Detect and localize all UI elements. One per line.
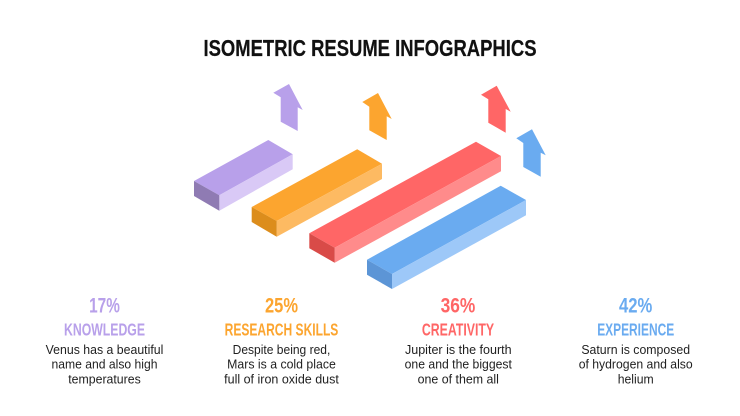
percentage: 42%: 42% [619,294,653,318]
arrow: experience [516,129,546,177]
description: research skills: full of iron oxide dust [224,371,339,386]
percentage: 17%: 17% [89,294,120,318]
description: research skills [224,342,339,386]
panel: knowledge [46,294,163,386]
description: creativity: Jupiter is the fourth [405,342,512,357]
description: knowledge [46,342,163,386]
description: experience [579,342,693,386]
label: knowledge: KNOWLEDGE [64,319,145,339]
description: creativity [405,342,512,386]
label: creativity: CREATIVITY [422,319,494,339]
arrow: research skills [362,93,392,140]
bar: experience [367,186,526,289]
arrow: knowledge [273,84,303,131]
bar: research skills [252,149,382,237]
description: research skills: Despite being red, [233,342,330,357]
title: ISOMETRIC RESUME INFOGRAPHICS [204,35,536,61]
description: research skills: Mars is a cold place [227,357,336,372]
label: experience: EXPERIENCE [597,319,674,339]
description: experience: Saturn is composed [581,342,690,357]
description: knowledge: temperatures [68,371,141,386]
label: research skills: RESEARCH SKILLS [225,319,338,339]
arrow: creativity [481,86,511,133]
panel: creativity [405,294,512,386]
bar: creativity [309,142,501,263]
description: creativity: one of them all [418,371,499,386]
description: knowledge: name and also high [52,357,158,372]
description: experience: helium [618,371,654,386]
panel: research skills [224,294,339,386]
percentage: 25%: 25% [265,294,298,318]
bar: knowledge [194,140,293,211]
description: creativity: one and the biggest [405,357,512,372]
percentage: 36%: 36% [441,294,476,318]
isometric bar chart [194,84,546,289]
description: experience: of hydrogen and also [579,357,693,372]
description: knowledge: Venus has a beautiful [46,342,163,357]
panel: experience [579,294,693,386]
